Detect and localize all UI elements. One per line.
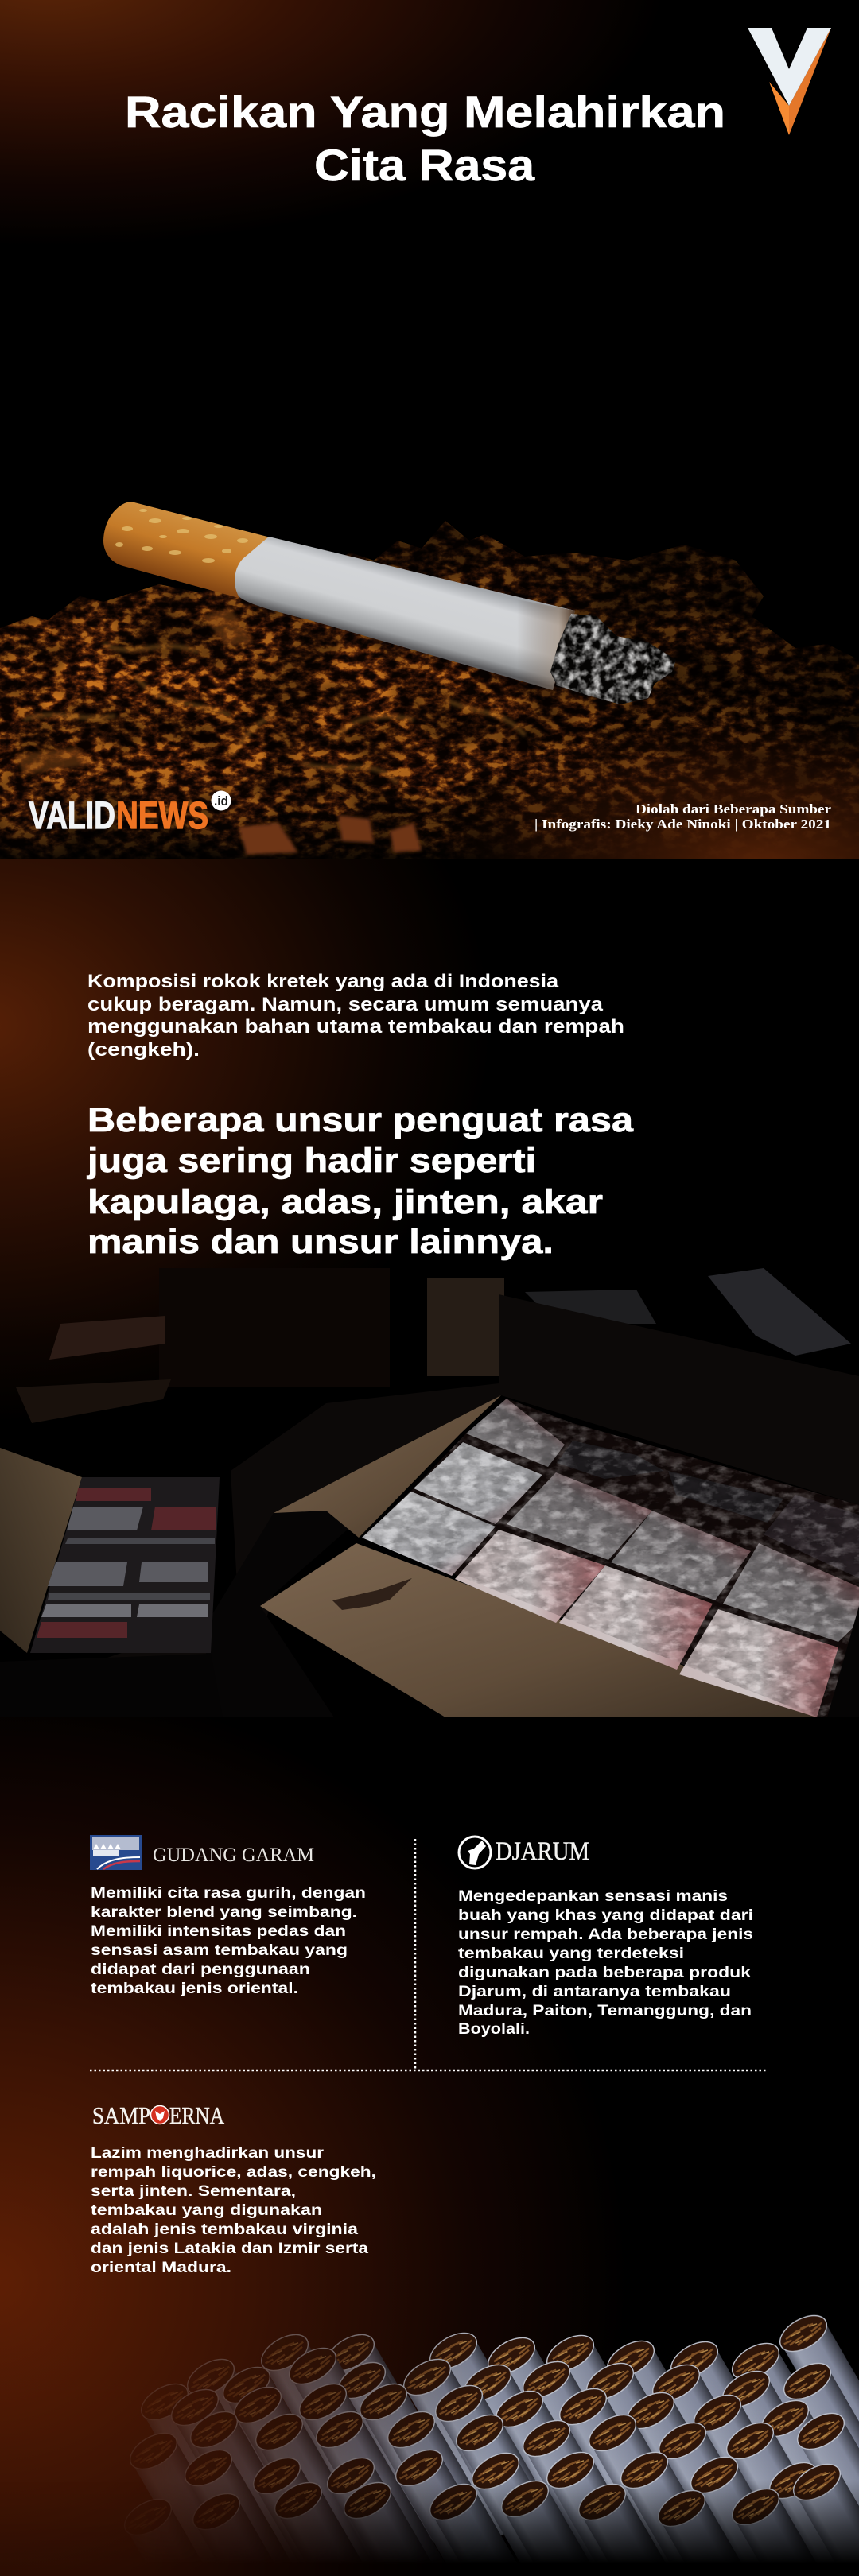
description: Gudang Garam: didapat dari penggunaan bbox=[91, 1961, 310, 1978]
right edge shadow bbox=[827, 1606, 859, 1717]
dark box walls bbox=[0, 1294, 859, 1717]
logo: Sampoerna: ERNA bbox=[169, 2101, 224, 2129]
intro paragraph bbox=[87, 971, 624, 1061]
description: Sampoerna: adalah jenis tembakau virginia bbox=[91, 2221, 358, 2238]
photo: rows of cigarettes seen end-on bbox=[126, 2314, 859, 2576]
highlighted statement bbox=[87, 1101, 634, 1261]
intro paragraph: cukup beragam. Namun, secara umum semuanya bbox=[87, 994, 604, 1015]
description: Djarum bbox=[458, 1887, 753, 2038]
description: Sampoerna: tembakau yang digunakan bbox=[91, 2202, 322, 2219]
burning ash tip bbox=[549, 612, 680, 708]
intro paragraph: Komposisi rokok kretek yang ada di Indonesia bbox=[87, 971, 559, 992]
description: Djarum: unsur rempah. Ada beberapa jenis bbox=[458, 1926, 753, 1943]
icon: V logo bbox=[748, 28, 831, 135]
description: Djarum: Djarum, di antaranya tembakau bbox=[458, 1983, 731, 2000]
description: Djarum: Boyolali. bbox=[458, 2020, 530, 2038]
faint background boxes bbox=[16, 1268, 851, 1423]
cover footer bbox=[29, 790, 832, 837]
main box cardboard flaps bbox=[260, 1395, 822, 1717]
left box flap bbox=[0, 1448, 82, 1653]
logo: Gudang Garam bbox=[90, 1835, 314, 1870]
description: Gudang Garam: tembakau jenis oriental. bbox=[91, 1980, 298, 1997]
source credit: Diolah dari Beberapa Sumber bbox=[636, 801, 832, 817]
highlighted statement: manis dan unsur lainnya. bbox=[87, 1223, 554, 1261]
Validnews logo: VALID bbox=[29, 795, 115, 837]
description: Sampoerna: Lazim menghadirkan unsur bbox=[91, 2144, 324, 2162]
description: Sampoerna: rempah liquorice, adas, cengkeh, bbox=[91, 2163, 376, 2181]
panel: Djarum bbox=[458, 1837, 753, 2038]
description: Sampoerna: dan jenis Latakia dan Izmir serta bbox=[91, 2240, 368, 2257]
torn tape bbox=[332, 1578, 412, 1610]
source credit: | Infografis: Dieky Ade Ninoki | Oktober 2021 bbox=[534, 817, 831, 832]
description: Djarum: buah yang khas yang didapat dari bbox=[458, 1907, 753, 1924]
main box cigarette packs bbox=[362, 1399, 859, 1717]
highlighted statement: kapulaga, adas, jinten, akar bbox=[87, 1183, 603, 1221]
logo: Sampoerna: SAMP bbox=[92, 2101, 150, 2129]
description: Sampoerna bbox=[91, 2144, 376, 2276]
intro paragraph: menggunakan bahan utama tembakau dan rempah bbox=[87, 1016, 624, 1038]
Validnews logo: NEWS bbox=[116, 795, 208, 837]
panel: Sampoerna bbox=[91, 2101, 376, 2276]
description: Sampoerna: serta jinten. Sementara, bbox=[91, 2182, 296, 2200]
cigarette paper bbox=[235, 537, 575, 690]
description: Gudang Garam: Memiliki intensitas pedas dan bbox=[91, 1922, 346, 1940]
description: Gudang Garam: sensasi asam tembakau yang bbox=[91, 1942, 348, 1959]
left box cigarette cartons bbox=[0, 1477, 223, 1717]
logo: Djarum bbox=[459, 1837, 589, 1868]
photo: cigarette cartons in cardboard boxes bbox=[0, 1268, 859, 1717]
description: Gudang Garam: karakter blend yang seimbang. bbox=[91, 1903, 357, 1921]
logo: Gudang Garam: GUDANG GARAM bbox=[153, 1845, 314, 1866]
logo: Djarum: DJARUM bbox=[496, 1837, 589, 1866]
description: Sampoerna: oriental Madura. bbox=[91, 2259, 231, 2276]
tobacco pile bbox=[0, 521, 859, 859]
description: Djarum: Madura, Paiton, Temanggung, dan bbox=[458, 2002, 752, 2019]
description: Djarum: digunakan pada beberapa produk bbox=[458, 1964, 751, 1981]
title bbox=[125, 87, 725, 190]
intro paragraph: (cengkeh). bbox=[87, 1039, 200, 1061]
logo: Sampoerna bbox=[92, 2101, 224, 2129]
photo: tobacco pile with cigarette bbox=[0, 502, 859, 859]
highlighted statement: juga sering hadir seperti bbox=[87, 1142, 536, 1180]
title: Cita Rasa bbox=[314, 140, 535, 190]
source credit bbox=[534, 801, 832, 832]
Validnews logo: .id bbox=[214, 793, 228, 809]
description: Djarum: tembakau yang terdeteksi bbox=[458, 1945, 684, 1962]
description: Djarum: Mengedepankan sensasi manis bbox=[458, 1887, 728, 1905]
highlighted statement: Beberapa unsur penguat rasa bbox=[87, 1101, 634, 1139]
panel: Gudang Garam bbox=[90, 1835, 366, 1997]
description: Gudang Garam: Memiliki cita rasa gurih, dengan bbox=[91, 1884, 366, 1902]
cigarette filter bbox=[103, 502, 270, 598]
Validnews logo bbox=[29, 790, 231, 837]
description: Gudang Garam bbox=[91, 1884, 366, 1997]
title: Racikan Yang Melahirkan bbox=[125, 87, 725, 137]
